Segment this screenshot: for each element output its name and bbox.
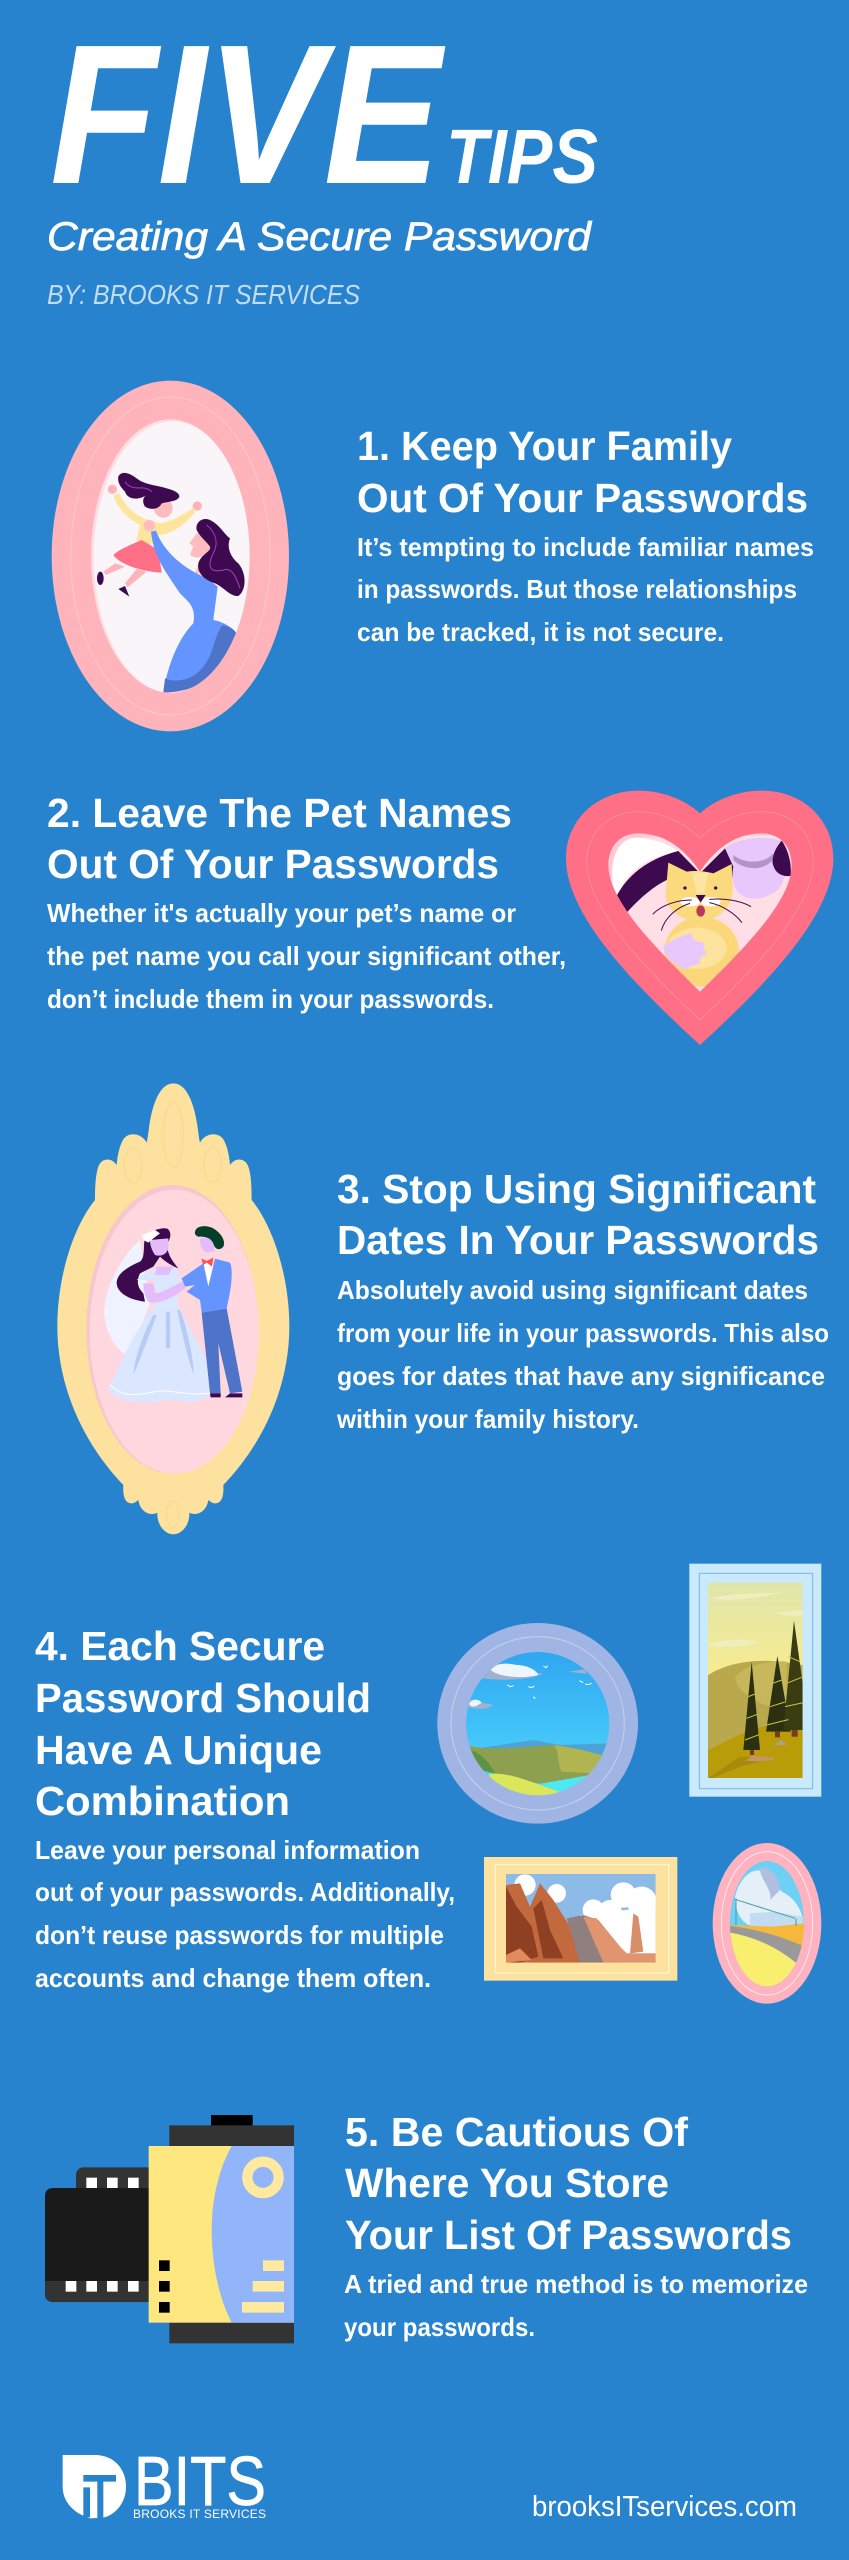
tip 5 body: [344, 2269, 808, 2342]
icon: ornate mirror frame with wedding couple: [57, 1083, 289, 1534]
tip 1 heading: [357, 423, 808, 521]
logo: BITS: [63, 2442, 266, 2521]
tip 5 heading: [345, 2109, 792, 2258]
frame: canyon landscape: [484, 1857, 677, 1981]
tip 3 body: Absolutely avoid using significant dates: [337, 1275, 808, 1305]
tip 4 body: Leave your personal information: [35, 1835, 420, 1865]
tip 5 heading: Your List Of Passwords: [345, 2212, 792, 2258]
title word: FIVE: FIVE: [50, 4, 446, 226]
tip 3 heading: [337, 1166, 819, 1263]
logo mark: [63, 2455, 126, 2518]
tip 2 body: the pet name you call your significant other,: [47, 941, 566, 971]
tip 3 body: [336, 1275, 829, 1434]
frame: pink oval road landscape: [713, 1843, 821, 2004]
title: [50, 4, 598, 226]
icon: film roll: [45, 2115, 294, 2343]
website url: brooksITservices.com: [532, 2491, 797, 2523]
tip 4 heading: Combination: [35, 1778, 290, 1824]
icon: heart frame with cat: [566, 791, 833, 1045]
tip 4 text: [35, 1623, 455, 1993]
tip 1 body: in passwords. But those relationships: [357, 574, 797, 604]
logo wordmark: BITS: [134, 2442, 266, 2520]
byline: BY: BROOKS IT SERVICES: [47, 279, 360, 310]
tip 1 heading: Out Of Your Passwords: [357, 475, 808, 521]
tip 2 text: [47, 790, 566, 1014]
icon: gallery of landscape frames: [437, 1564, 821, 2004]
tip 1 text: [357, 423, 814, 647]
title word: TIPS: TIPS: [446, 114, 598, 200]
logo tagline: BROOKS IT SERVICES: [133, 2507, 266, 2521]
tip 3 body: goes for dates that have any significance: [337, 1361, 825, 1391]
tip 2 body: Whether it's actually your pet’s name or: [47, 898, 516, 928]
tip 3 text: [336, 1166, 829, 1434]
tip 3 heading: Dates In Your Passwords: [337, 1217, 819, 1263]
tip 4 heading: [35, 1623, 371, 1824]
tip 5 body: your passwords.: [344, 2312, 535, 2342]
tip 5 text: [344, 2109, 808, 2342]
tip 4 heading: 4. Each Secure: [35, 1623, 325, 1669]
tip 4 heading: Password Should: [35, 1675, 371, 1721]
tip 1 body: can be tracked, it is not secure.: [357, 617, 724, 647]
tip 1 body: It’s tempting to include familiar names: [357, 532, 814, 562]
frame: round landscape: [437, 1623, 638, 1824]
tip 5 body: A tried and true method is to memorize: [344, 2269, 808, 2299]
tip 2 body: [47, 898, 566, 1014]
tip 4 body: out of your passwords. Additionally,: [35, 1877, 455, 1907]
tip 3 body: within your family history.: [336, 1404, 639, 1434]
tip 4 body: accounts and change them often.: [35, 1963, 431, 1993]
tip 1 heading: 1. Keep Your Family: [357, 423, 732, 469]
tip 2 heading: [47, 790, 512, 887]
tip 2 heading: Out Of Your Passwords: [47, 841, 499, 887]
tip 4 body: [35, 1835, 455, 1993]
tip 1 body: [357, 532, 814, 647]
subtitle: Creating A Secure Password: [47, 215, 593, 259]
tip 2 heading: 2. Leave The Pet Names: [47, 790, 512, 836]
frame: tall pine trees: [689, 1564, 821, 1797]
cat hand: [663, 933, 707, 970]
tip 4 body: don’t reuse passwords for multiple: [35, 1920, 444, 1950]
cat head: [666, 863, 733, 920]
tip 5 heading: 5. Be Cautious Of: [345, 2109, 688, 2155]
tip 2 body: don’t include them in your passwords.: [47, 984, 494, 1014]
tip 5 heading: Where You Store: [345, 2160, 669, 2206]
tip 4 heading: Have A Unique: [35, 1727, 322, 1773]
tip 3 heading: 3. Stop Using Significant: [337, 1166, 816, 1212]
icon: family portrait oval frame: [52, 381, 289, 731]
